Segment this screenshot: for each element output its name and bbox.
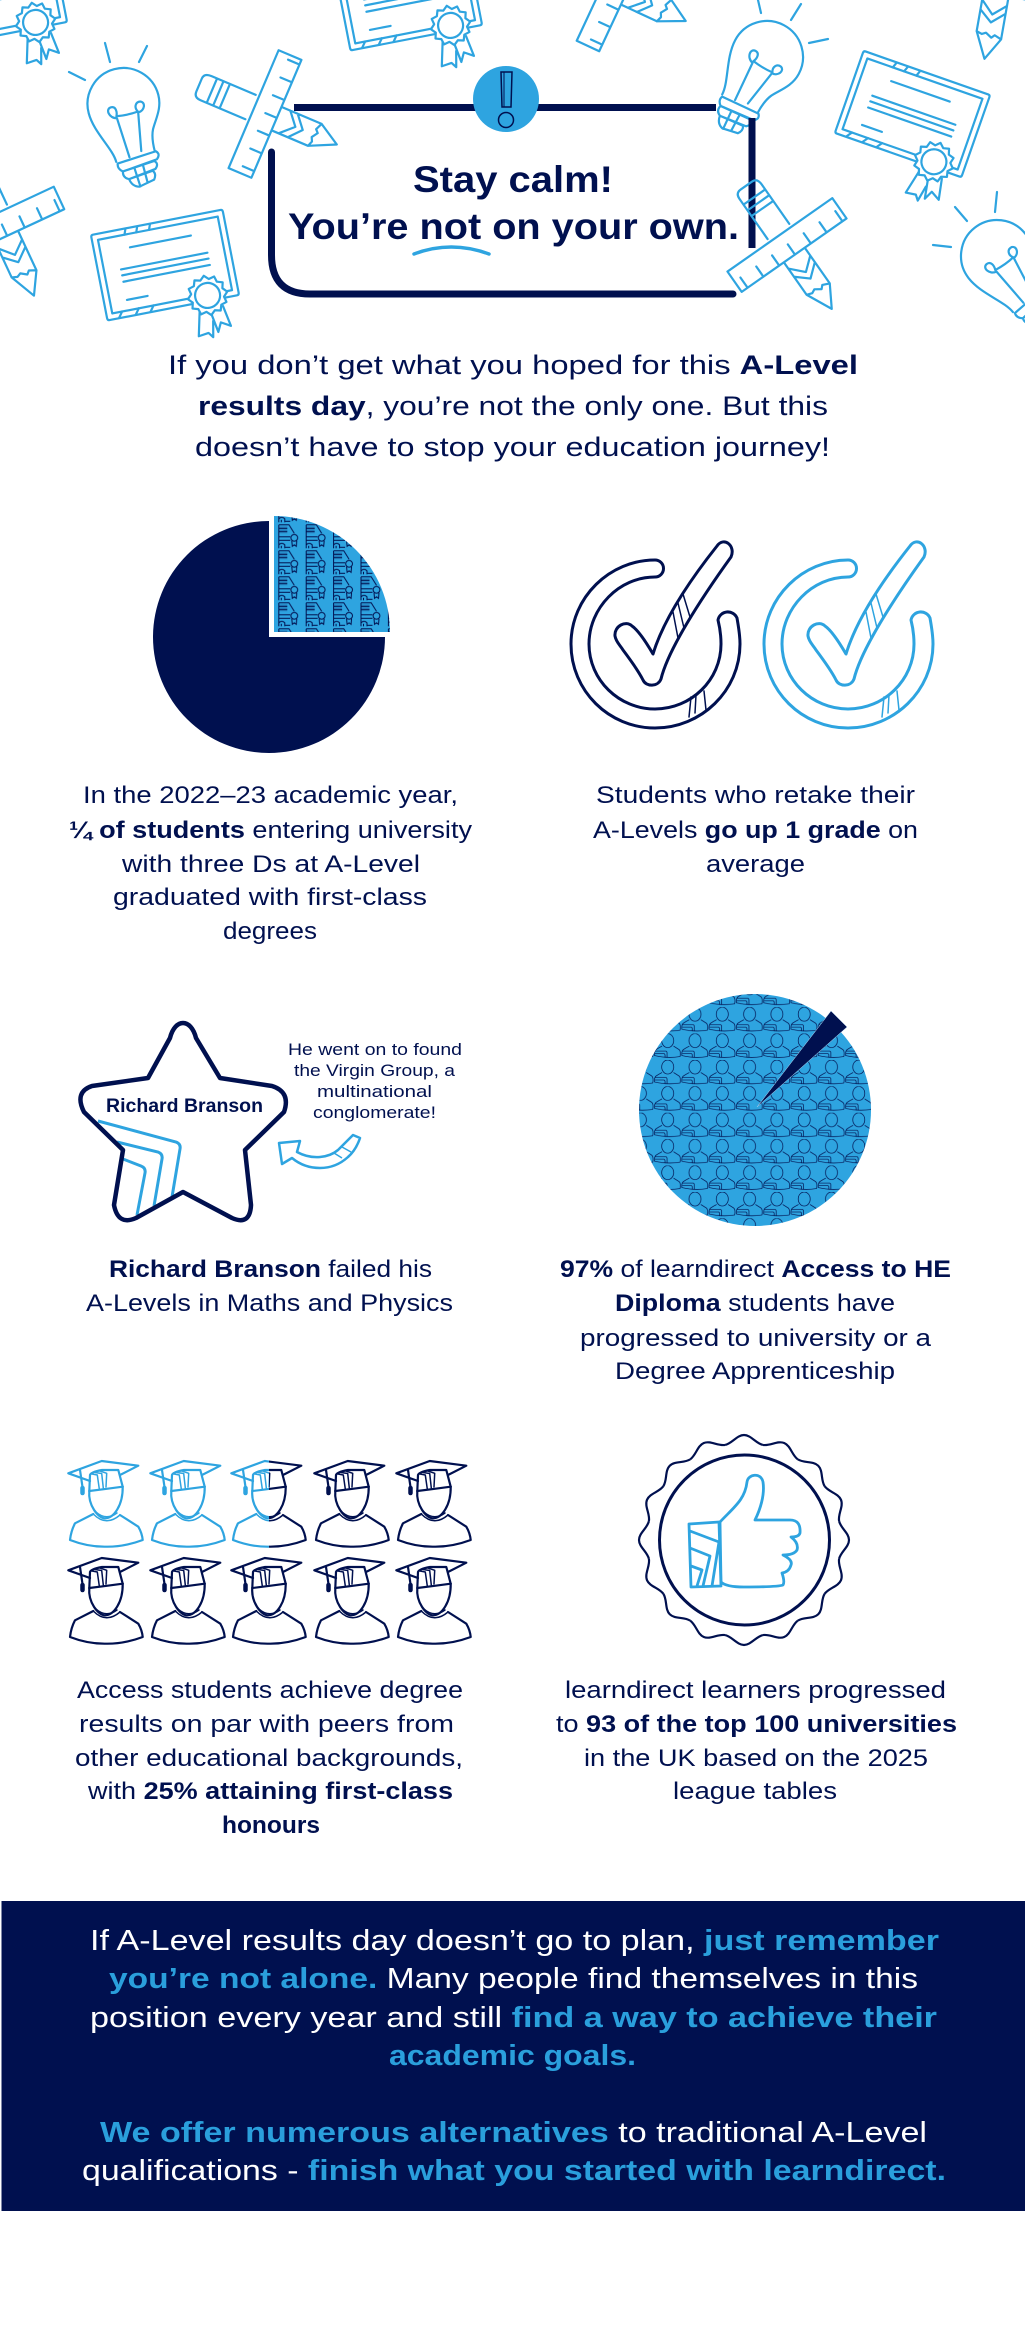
icon: light bulb far right bbox=[933, 192, 1025, 344]
stat text: Richard Branson bbox=[86, 1256, 453, 1317]
stat text: Richard Branson: A-Levels in Maths and Physics bbox=[86, 1290, 453, 1317]
stat text: Richard Branson: Richard Branson failed his bbox=[109, 1256, 432, 1283]
panel: closing message: academic goals. bbox=[389, 2040, 636, 2072]
stat text: first-class honours: Access students achieve degree bbox=[77, 1677, 463, 1704]
stat text: first-class degrees bbox=[69, 782, 472, 945]
intro paragraph bbox=[168, 350, 858, 462]
stat text: first-class degrees: with three Ds at A-Level bbox=[121, 851, 420, 878]
pencil and ruler over box right bbox=[693, 149, 884, 346]
graduates: blue bbox=[68, 1461, 225, 1547]
pie chart: 97 percent bbox=[639, 994, 871, 1226]
graduate: half blue, half navy bbox=[231, 1461, 306, 1547]
header doodles bbox=[0, 0, 1025, 356]
title text: You’re not on your own. bbox=[288, 206, 739, 247]
callout: Virgin Group note: He went on to found bbox=[288, 1040, 462, 1059]
stat text: top universities bbox=[556, 1677, 957, 1805]
stat text: retakes bbox=[593, 782, 918, 878]
stat text: first-class degrees: ¼ of students entering university bbox=[69, 817, 472, 844]
title box bbox=[174, 27, 884, 346]
title text bbox=[288, 159, 739, 247]
stat text: first-class degrees: graduated with first-class bbox=[113, 884, 427, 911]
icon: star with name: Richard Branson bbox=[106, 1096, 263, 1117]
stat text: Access to HE: Diploma students have bbox=[615, 1290, 895, 1317]
stat text: first-class honours: honours bbox=[222, 1812, 320, 1839]
callout: Virgin Group note: the Virgin Group, a bbox=[294, 1061, 456, 1080]
underline swoosh bbox=[414, 247, 489, 254]
panel: closing message: We offer numerous alternatives to traditional A-Level bbox=[100, 2117, 927, 2149]
icon grid: ten graduates bbox=[68, 1461, 471, 1644]
stat text: Access to HE: progressed to university or a bbox=[580, 1325, 932, 1352]
icon: certificate lower left bbox=[91, 210, 246, 356]
icon: pencil and ruler top centre bbox=[523, 0, 713, 79]
stat text: retakes: A-Levels go up 1 grade on bbox=[593, 817, 918, 844]
panel: closing message: position every year and still find a way to achieve their bbox=[90, 2002, 937, 2034]
icon: exclamation badge bbox=[473, 66, 539, 132]
stat text: Access to HE: 97% of learndirect Access to HE bbox=[560, 1256, 951, 1283]
stat text: top universities: league tables bbox=[673, 1778, 837, 1805]
intro paragraph: If you don’t get what you hoped for this A-Level bbox=[168, 350, 858, 380]
panel: closing message: you’re not alone. Many people find themselves in this bbox=[109, 1963, 918, 1995]
stat text: first-class honours bbox=[75, 1677, 463, 1839]
icon: thumbs up badge bbox=[639, 1435, 849, 1645]
arrow: callout to star bbox=[279, 1135, 360, 1168]
icon: certificate top left bbox=[0, 0, 74, 83]
stat text: top universities: in the UK based on the 2025 bbox=[584, 1745, 928, 1772]
callout: Virgin Group note: conglomerate! bbox=[313, 1103, 436, 1122]
graduates: navy bbox=[68, 1461, 471, 1644]
intro paragraph: doesn’t have to stop your education journey! bbox=[195, 432, 830, 462]
stat text: first-class honours: with 25% attaining first-class bbox=[87, 1778, 453, 1805]
callout: Virgin Group note bbox=[288, 1040, 462, 1122]
callout: Virgin Group note: multinational bbox=[317, 1082, 432, 1101]
stat text: first-class degrees: degrees bbox=[223, 918, 317, 945]
stat text: top universities: to 93 of the top 100 universities bbox=[556, 1711, 957, 1738]
intro paragraph: results day , you’re not the only one. But this bbox=[198, 391, 828, 421]
icon: navy tick bbox=[571, 542, 740, 728]
icon: light bulb top right bbox=[696, 0, 828, 148]
panel: closing message bbox=[2, 1901, 1025, 2211]
pie chart: one quarter bbox=[153, 516, 390, 753]
icon: certificate top centre bbox=[334, 0, 489, 86]
stat text: retakes: average bbox=[706, 851, 805, 878]
icon: pencil and ruler top right bbox=[921, 0, 1025, 70]
icon: light bulb left bbox=[69, 43, 180, 194]
icon: certificate right bbox=[823, 51, 990, 212]
panel: closing message: qualifications - finish what you started with learndirect. bbox=[82, 2155, 946, 2187]
stat text: first-class degrees: In the 2022–23 academic year, bbox=[83, 782, 458, 809]
icon: pencil and ruler far left bbox=[0, 133, 92, 323]
stat text: Access to HE bbox=[560, 1256, 951, 1385]
pencil and ruler over box left bbox=[174, 27, 362, 203]
stat text: first-class honours: other educational backgrounds, bbox=[75, 1745, 463, 1772]
stat text: first-class honours: results on par with peers from bbox=[79, 1711, 454, 1738]
panel: closing message: If A-Level results day doesn’t go to plan, just remember bbox=[90, 1925, 939, 1957]
icon: star with name bbox=[80, 1023, 286, 1220]
stat text: retakes: Students who retake their bbox=[596, 782, 915, 809]
title text: Stay calm! bbox=[413, 159, 613, 200]
icon: blue tick bbox=[764, 542, 933, 728]
stat text: top universities: learndirect learners progressed bbox=[565, 1677, 946, 1704]
stat text: Access to HE: Degree Apprenticeship bbox=[615, 1358, 895, 1385]
